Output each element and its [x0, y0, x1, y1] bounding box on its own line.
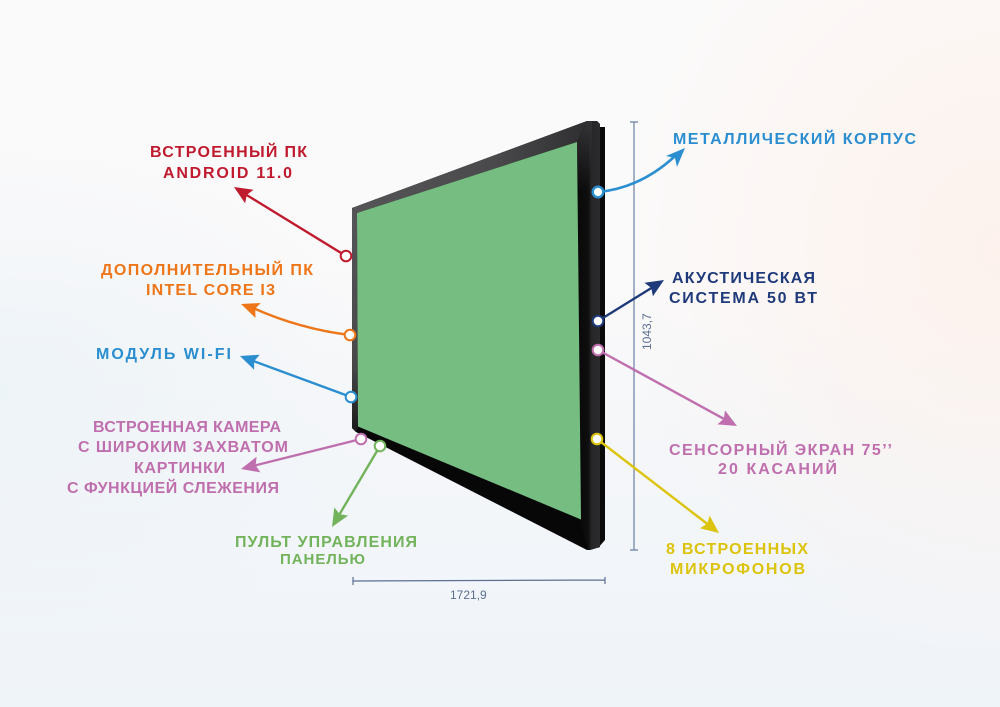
- callout: camera: С ШИРОКИМ ЗАХВАТОМ: [78, 439, 288, 456]
- callout: microphones: [592, 434, 808, 578]
- panel: monitor: [352, 121, 605, 550]
- callout: android pc: ANDROID 11.0: [163, 165, 292, 182]
- dimension: height: [630, 122, 654, 550]
- monitor top bezel: [352, 121, 587, 213]
- monitor back edge: [597, 127, 605, 548]
- callout: touch screen: СЕНСОРНЫЙ ЭКРАН 75’’: [669, 440, 892, 459]
- callout: camera: ВСТРОЕННАЯ КАМЕРА: [93, 419, 281, 436]
- callout: camera: С ФУНКЦИЕЙ СЛЕЖЕНИЯ: [67, 478, 279, 497]
- monitor side: [577, 121, 600, 550]
- callout: touch screen: 20 КАСАНИЙ: [718, 459, 837, 478]
- callout: microphones: МИКРОФОНОВ: [670, 561, 805, 578]
- callout: intel pc: [101, 260, 355, 340]
- monitor frame: [352, 121, 600, 550]
- callout: touch screen: [593, 345, 892, 478]
- callout: android pc: [150, 142, 351, 261]
- callout: remote: [235, 441, 417, 568]
- callout: remote: ПАНЕЛЬЮ: [280, 551, 365, 568]
- callout: metal case: МЕТАЛЛИЧЕСКИЙ КОРПУС: [673, 129, 916, 148]
- callout: acoustics: СИСТЕМА 50 ВТ: [669, 290, 817, 307]
- callout: remote: ПУЛЬТ УПРАВЛЕНИЯ: [235, 534, 417, 551]
- monitor top corner: [577, 121, 592, 190]
- callout: camera: [67, 419, 366, 497]
- callout: microphones: 8 ВСТРОЕННЫХ: [666, 541, 808, 558]
- dimension: width: [353, 577, 605, 602]
- dimension: height: 1043,7: [640, 313, 654, 350]
- monitor left bezel: [352, 208, 358, 432]
- callout: acoustics: [593, 270, 817, 326]
- callout: wifi: МОДУЛЬ WI-FI: [96, 346, 231, 363]
- callout: camera: КАРТИНКИ: [134, 460, 225, 477]
- green screen: [357, 142, 581, 520]
- dimension: width: 1721,9: [450, 588, 487, 602]
- callout: android pc: ВСТРОЕННЫЙ ПК: [150, 142, 307, 161]
- callout: acoustics: АКУСТИЧЕСКАЯ: [672, 270, 815, 287]
- callout: metal case: [593, 129, 916, 197]
- callout: wifi: [96, 346, 356, 402]
- callout: intel pc: ДОПОЛНИТЕЛЬНЫЙ ПК: [101, 260, 313, 279]
- callout: intel pc: INTEL CORE I3: [146, 282, 275, 299]
